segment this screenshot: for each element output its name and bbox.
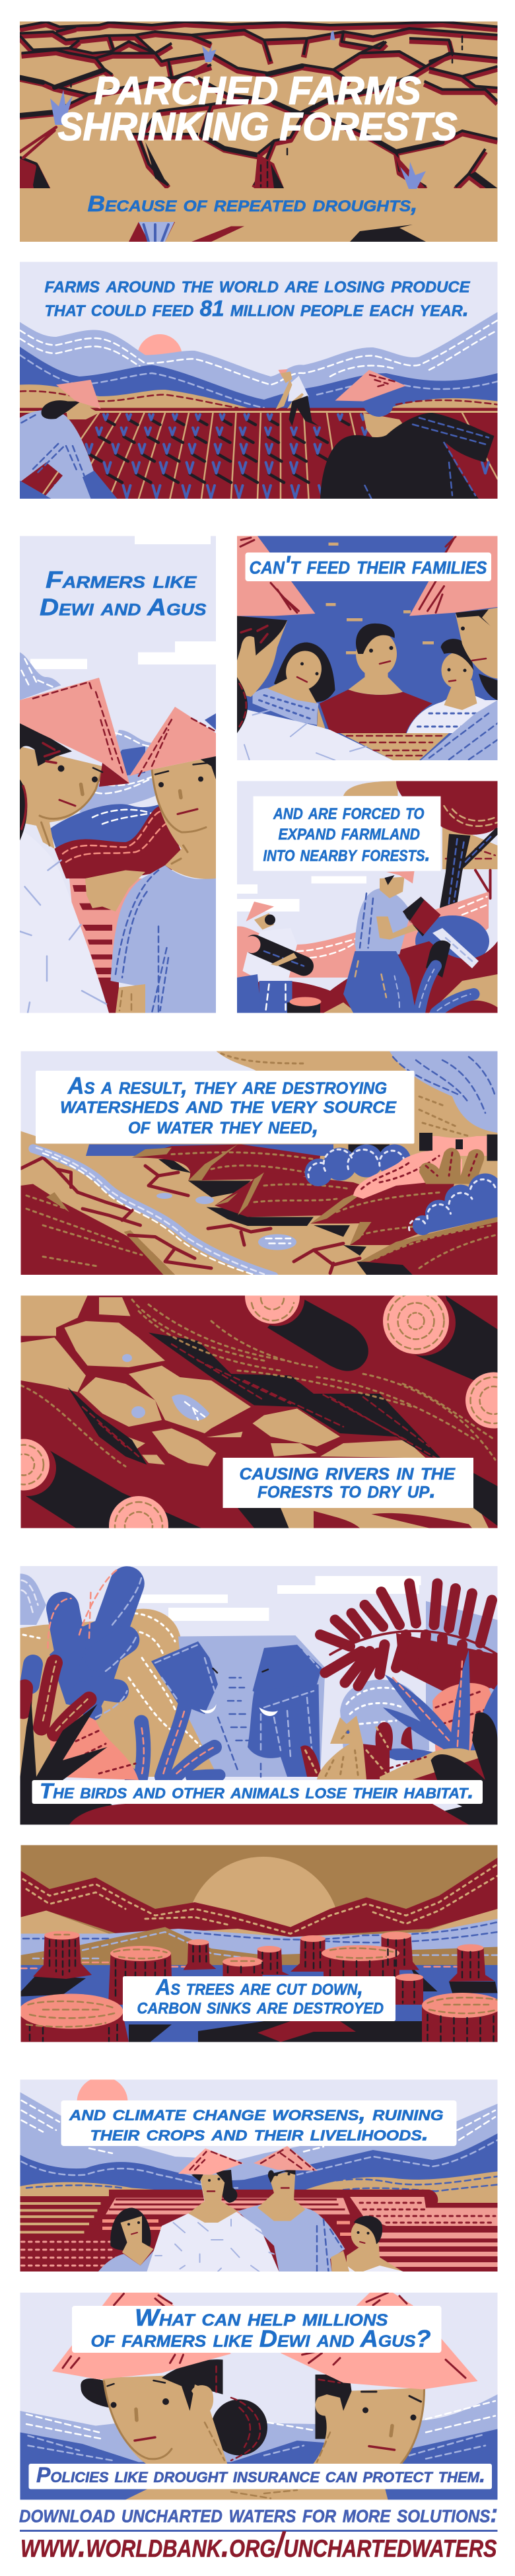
figure: farmer right [320, 370, 494, 499]
cracks in riverbed [21, 1157, 360, 1273]
panel: cracked earth [20, 21, 498, 243]
section: watersheds [21, 1052, 498, 1528]
caption: what can help: What can help millions [135, 2304, 388, 2331]
panel: jungle animals [20, 1566, 498, 1824]
caption: destroying watersheds: As a result, they are destroying [67, 1072, 387, 1099]
fox [300, 1716, 390, 1779]
river [33, 1148, 296, 1276]
caption: forced to expand farmland: and are forced to [273, 799, 425, 824]
red fields [20, 2190, 498, 2272]
black foliage [20, 1701, 498, 1824]
caption: carbon sinks destroyed: As trees are cut down, [155, 1975, 363, 2000]
title: PARCHED FARMS [94, 69, 421, 112]
caption: forced to expand farmland [254, 797, 441, 871]
caption: what can help [72, 2304, 441, 2353]
bushes [305, 1144, 502, 1235]
figure: woman [147, 2148, 279, 2272]
panel: hungry family [237, 536, 498, 760]
figure: man with axe [343, 871, 441, 1013]
crop sprouts [55, 415, 489, 498]
tree [396, 781, 498, 908]
stitched bark marks [21, 1300, 495, 1466]
title [58, 69, 457, 149]
saw [426, 928, 479, 978]
pink and blue shrubs right [373, 1650, 498, 1760]
caption: rivers dry up: forests to dry up. [258, 1476, 436, 1503]
panel: Dewi and Agus portrait [20, 536, 216, 1013]
caption: farmers like Dewi and Agus: Dewi and Agus [40, 593, 207, 621]
caption: climate change worsens: their crops and their livelihoods. [90, 2122, 429, 2145]
figure: man in red shirt [320, 624, 432, 733]
panel: clearing the forest [237, 781, 498, 1013]
caption: destroying watersheds [36, 1071, 415, 1144]
tree stumps [18, 1931, 502, 2042]
figure: left farmer with white shirt [20, 678, 129, 1013]
caption: climate change worsens [61, 2100, 457, 2146]
red and tan field strip [340, 733, 449, 760]
icon: sun [186, 1857, 340, 2011]
panel: tree stumps at sunset [18, 1845, 502, 2042]
panel: farm workers in red field [20, 262, 498, 499]
title: SHRINKING FORESTS [58, 105, 457, 149]
panel: logs and dry riverbed [21, 1296, 498, 1528]
figure: man [238, 2146, 349, 2272]
rocks and shadows [21, 1144, 498, 1275]
caption: farms losing produce: farms around the world are losing produce [45, 272, 470, 297]
blue hills [21, 1919, 498, 1968]
hands [125, 2487, 388, 2499]
field furrows [20, 412, 498, 499]
caption: rivers dry up [223, 1458, 473, 1508]
caption: what can help: of farmers like Dewi and Agus? [91, 2325, 431, 2352]
section: opening panels [20, 21, 498, 499]
caption: carbon sinks destroyed [123, 1975, 395, 2021]
figure: farmer left [20, 380, 118, 499]
figure: Agus [281, 2293, 478, 2465]
section: habitat and carbon [18, 1566, 502, 2042]
caption: animals lose habitat: The birds and other animals lose their habitat. [40, 1779, 474, 1803]
caption: forced to expand farmland: expand farmland [279, 820, 420, 845]
figure: girl left [98, 2207, 155, 2272]
icon: blue tufts and red stems [20, 30, 426, 242]
puddles [122, 1354, 210, 1420]
caption: destroying watersheds: of water they need, [128, 1112, 318, 1139]
red fern [320, 1584, 498, 1691]
section: climate and solutions [19, 2077, 498, 2565]
tree canopy [349, 1052, 498, 1161]
caption: can't feed their families: can't feed their families [250, 551, 487, 580]
logs [0, 1269, 515, 1556]
figure: left foreground person [237, 536, 393, 760]
red mountains [21, 1857, 498, 1937]
figure: right farmer with blue shirt [111, 707, 216, 1013]
caption: forced to expand farmland: into nearby forests. [263, 841, 430, 867]
caption: farmers like Dewi and Agus [40, 566, 207, 621]
caption: rivers dry up: causing rivers in the [239, 1458, 456, 1485]
blue plants [395, 966, 474, 1013]
icon: sun [77, 2077, 128, 2128]
panel: family looking over failed fields [20, 2077, 498, 2272]
panel: Dewi and Agus closeup [20, 2293, 498, 2499]
tree stump [287, 997, 321, 1013]
caption: droughts: Because of repeated droughts, [87, 192, 417, 217]
figure: girl in white [407, 639, 498, 733]
clouds [237, 876, 366, 912]
caption: carbon sinks destroyed: carbon sinks are destroyed [137, 1993, 384, 2019]
red ground [69, 1804, 469, 1824]
caption: farmers like Dewi and Agus: Farmers like [46, 566, 197, 593]
caption: destroying watersheds: watersheds and the very source [60, 1091, 397, 1118]
shadows beneath logs [67, 1333, 498, 1528]
caption: policies: Policies like drought insurance can protect them. [36, 2463, 485, 2487]
section: farmers [20, 536, 498, 1013]
elephant [151, 1635, 325, 1777]
figure: right foreground person [409, 536, 498, 760]
figure: boy right [347, 2216, 403, 2272]
clouds [30, 536, 216, 669]
big blue leaf plant [30, 1569, 142, 1717]
figure: girl in blue dress [252, 642, 335, 728]
caption: climate change worsens: and climate change worsens, ruining [69, 2101, 444, 2125]
figure: farmer in distance [276, 369, 318, 426]
figure: woman carrying log [237, 902, 304, 1013]
cast shadows [21, 1965, 498, 2042]
panel: drying river landscape [21, 1052, 502, 1276]
figure: Dewi [52, 2293, 267, 2465]
red and tan shrubs left [23, 1661, 498, 1783]
caption: farms losing produce: that could feed 81 million people each year. [45, 296, 469, 321]
caption: farms losing produce [45, 272, 470, 321]
dry plates [21, 1296, 489, 1528]
clouds [139, 1576, 421, 1621]
lower blue fern [107, 1705, 219, 1780]
icon: sun [139, 334, 182, 355]
